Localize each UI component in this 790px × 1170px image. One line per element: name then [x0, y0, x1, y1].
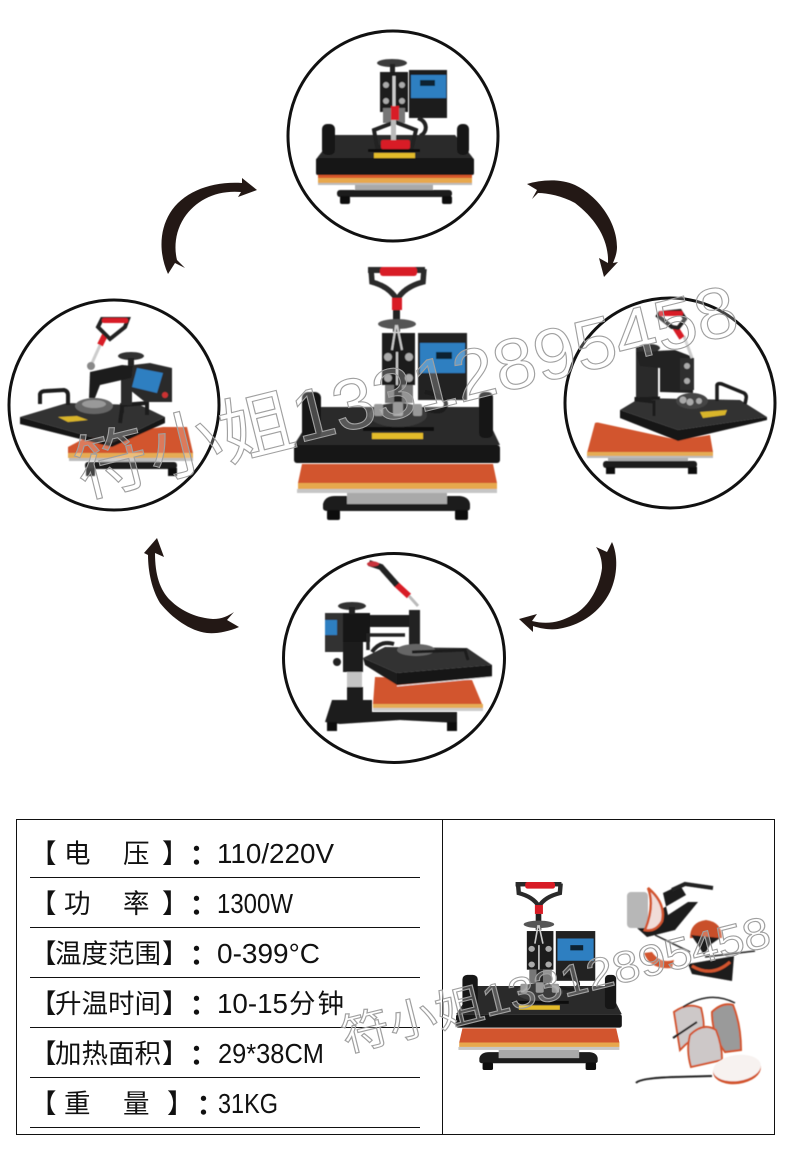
row: voltage: ：: [182, 840, 211, 872]
row: voltage: 压: [123, 839, 150, 869]
row: heat-up time: 升温时间: [55, 989, 161, 1019]
row: temperature range: 】: [162, 939, 188, 969]
arrow: bottom right: [519, 542, 616, 632]
row: power: 率: [123, 889, 150, 919]
row: power: [30, 888, 293, 922]
circle: left view press: [9, 300, 219, 510]
row: voltage: 】: [162, 839, 188, 869]
row: power: 功: [64, 889, 90, 919]
row: weight: 【: [30, 1089, 56, 1119]
press: side view: [325, 562, 492, 731]
row: heating area: 【: [30, 1039, 56, 1069]
press: swung to the left: [20, 318, 193, 476]
row: voltage: 【: [30, 839, 56, 869]
table image: press with accessories: [456, 882, 763, 1087]
row: heat-up time: 分钟: [289, 989, 344, 1019]
press handle: [368, 267, 425, 332]
spec rows: [30, 838, 344, 1122]
row: power: 1300W: [217, 888, 293, 919]
row: heat-up time: ：: [182, 990, 211, 1022]
circle: right view press: [565, 298, 775, 508]
row: heat-up time: [30, 988, 344, 1022]
row: weight: [30, 1088, 278, 1122]
row: heat-up time: 【: [30, 989, 56, 1019]
row: heating area: ：: [182, 1040, 211, 1072]
spec table frame: [16, 820, 774, 1134]
row: voltage: [30, 838, 335, 872]
row: heating area: 加热面积: [55, 1039, 161, 1069]
arrow: top right: [527, 180, 618, 277]
row: weight: 】: [167, 1089, 194, 1119]
row: power: ：: [182, 890, 211, 922]
mug heating elements: [673, 997, 741, 1067]
row: weight: 重: [64, 1089, 90, 1119]
circle: top view press: [288, 31, 498, 241]
row: weight: 量: [123, 1089, 150, 1119]
row: temperature range: 温度范围: [55, 939, 161, 969]
row: heating area: [30, 1038, 324, 1072]
press (scaled copy): [456, 882, 622, 1070]
watermark: main: 符小姐13312895458: [67, 270, 746, 513]
circle: bottom view press: [284, 554, 504, 762]
row dividers: [30, 878, 420, 1128]
row: voltage: 110/220V: [217, 838, 335, 869]
watermark: table: 符小姐13312895458: [337, 908, 775, 1062]
row: power: 【: [30, 889, 56, 919]
row: weight: ：: [190, 1090, 218, 1122]
row: heating area: 29*38CM: [218, 1038, 324, 1069]
row: heat-up time: 】: [162, 989, 188, 1019]
row: temperature range: 【: [30, 939, 56, 969]
press column: [382, 325, 415, 403]
center press machine: [294, 267, 500, 520]
row: heat-up time: 10-15: [217, 988, 288, 1019]
row: power: 】: [162, 889, 188, 919]
press: front view, handle folded down: [316, 59, 474, 204]
mug press accessory: [627, 884, 755, 981]
row: voltage: 电: [64, 839, 90, 869]
control box: [418, 333, 467, 400]
row: heating area: 】: [162, 1039, 188, 1069]
plate heating element: [636, 1052, 763, 1087]
arrow: top left: [161, 178, 257, 274]
press: swung to the right: [587, 311, 767, 474]
row: temperature range: [30, 938, 320, 972]
row: temperature range: 0-399°C: [217, 938, 320, 969]
row: weight: 31KG: [218, 1088, 278, 1119]
arrow: bottom left: [144, 538, 239, 633]
row: temperature range: ：: [182, 940, 211, 972]
